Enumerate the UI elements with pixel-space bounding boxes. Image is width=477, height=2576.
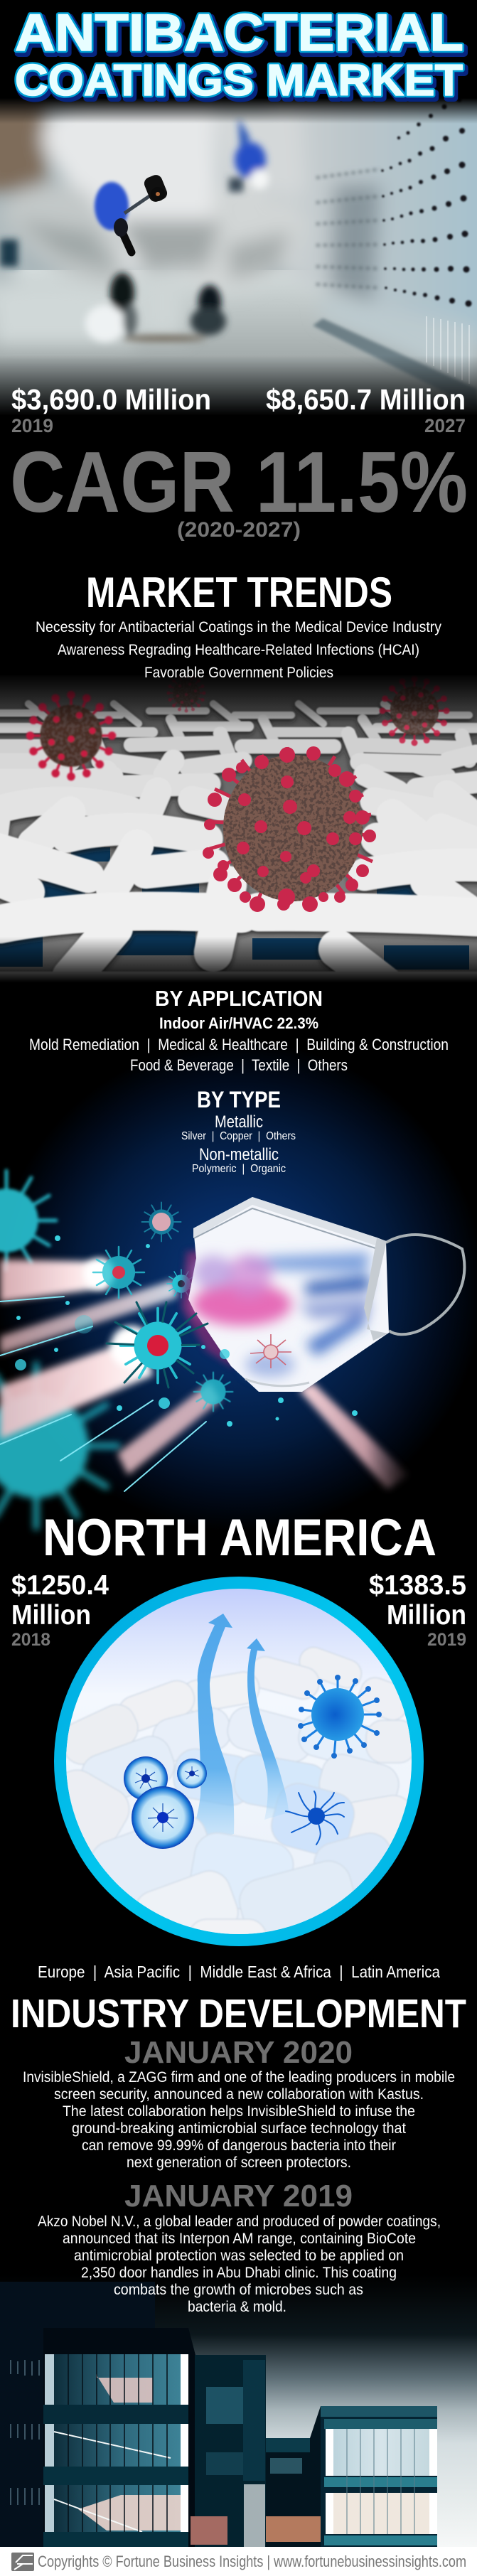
mask shadow glow xyxy=(181,1251,235,1368)
wall grille xyxy=(427,316,469,384)
market trends list: Favorable Government Policies xyxy=(144,665,333,681)
wall perforation streaks xyxy=(316,169,380,288)
date: january 2019: JANUARY 2019 xyxy=(124,2179,353,2213)
north america 2018 value: 2018 xyxy=(11,1630,50,1650)
CAGR headline: (2020-2027) xyxy=(177,518,301,542)
north america 2018 value: $1250.4 xyxy=(11,1570,109,1601)
title: COATINGS MARKET xyxy=(15,56,463,105)
icon: fortune business insights logo xyxy=(11,2553,34,2571)
january 2019 paragraph: bacteria & mold. xyxy=(188,2299,286,2315)
title: COATINGS MARKET xyxy=(17,59,465,108)
light beams xyxy=(0,1260,409,1489)
big blurred virus top left xyxy=(0,1171,56,1270)
leading application share: Indoor Air/HVAC 22.3% xyxy=(159,1014,318,1032)
title: ANTIBACTERIAL xyxy=(15,4,463,62)
low connecting block xyxy=(266,2406,324,2547)
market trends list xyxy=(36,619,441,681)
title: ANTIBACTERIAL xyxy=(15,4,463,62)
january 2020 paragraph xyxy=(23,2069,455,2171)
north america 2019 value: $1383.5 xyxy=(369,1570,466,1601)
floating particles xyxy=(15,1235,358,1427)
application list: Food & Beverage | Textile | Others xyxy=(130,1056,348,1074)
north america 2019 value: Million xyxy=(387,1600,466,1631)
type: metallic: Silver | Copper | Others xyxy=(181,1130,296,1142)
bubble bacteria xyxy=(124,1756,207,1849)
main block xyxy=(43,2328,200,2547)
type: non-metallic: Polymeric | Organic xyxy=(192,1163,286,1175)
tower left xyxy=(0,2282,155,2547)
market size 2019: 2019 xyxy=(11,415,53,436)
january 2019 paragraph xyxy=(38,2213,441,2315)
upward arrows xyxy=(196,1614,289,1835)
blue virus xyxy=(298,1675,382,1759)
january 2020 paragraph: can remove 99.99% of dangerous bacteria into their xyxy=(82,2137,396,2154)
type: metallic xyxy=(181,1112,296,1142)
cyan rays xyxy=(0,1297,206,1491)
background photo: office building xyxy=(0,2275,477,2547)
background virus right xyxy=(380,675,449,746)
january 2020 paragraph: The latest collaboration helps InvisibleShield to infuse the xyxy=(63,2103,415,2120)
january 2019 paragraph: combats the growth of microbes such as xyxy=(114,2282,363,2298)
title: COATINGS MARKET xyxy=(15,56,463,105)
january 2020 paragraph: next generation of screen protectors. xyxy=(127,2154,351,2171)
north america 2018 value: Million xyxy=(11,1600,91,1631)
woven fabric strands xyxy=(0,704,477,989)
market trends list: Awareness Regrading Healthcare-Related Infections (HCAI) xyxy=(58,642,419,658)
market size 2027: $8,650.7 Million xyxy=(266,383,466,416)
circle illustration: antibacterial coated surface xyxy=(33,1577,424,1962)
wall perforation dots xyxy=(381,97,472,307)
illustration: face mask blocking viruses xyxy=(0,1041,477,1532)
heading: north america: NORTH AMERICA xyxy=(43,1509,436,1567)
viruses xyxy=(84,1203,233,1412)
application list xyxy=(29,1036,449,1074)
january 2019 paragraph: announced that its Interpon AM range, containing BioCote xyxy=(63,2231,416,2247)
north america 2019 value xyxy=(369,1570,466,1650)
market size 2027: 2027 xyxy=(424,415,466,436)
title: ANTIBACTERIAL xyxy=(17,7,466,65)
background virus top xyxy=(166,680,206,713)
north america 2018 value xyxy=(11,1570,109,1650)
quilted pillows back rows xyxy=(66,1646,412,1855)
type: non-metallic: Non-metallic xyxy=(199,1145,279,1164)
other regions list: Europe | Asia Pacific | Middle East & Africa | Latin America xyxy=(38,1963,440,1981)
heading: by type: BY TYPE xyxy=(197,1087,281,1112)
tentacled bacterium xyxy=(286,1791,344,1845)
january 2019 paragraph: antimicrobial protection was selected to be applied on xyxy=(74,2248,404,2264)
january 2020 paragraph: ground-breaking antimicrobial surface technology that xyxy=(72,2120,406,2137)
market size 2027 xyxy=(266,383,466,436)
january 2019 paragraph: 2,350 door handles in Abu Dhabi clinic. This coating xyxy=(81,2265,397,2281)
mask body xyxy=(188,1197,389,1392)
market size 2019: $3,690.0 Million xyxy=(11,383,211,416)
mask strap xyxy=(386,1235,464,1334)
type: non-metallic xyxy=(192,1145,286,1175)
type: metallic: Metallic xyxy=(215,1112,263,1132)
photo: technician in protective suit disinfecting a corridor xyxy=(0,85,477,426)
virus on mask xyxy=(250,1334,291,1368)
footer bar xyxy=(0,2547,477,2576)
right block xyxy=(321,2406,437,2547)
date: january 2020: JANUARY 2020 xyxy=(124,2035,353,2070)
sprayer nozzle xyxy=(114,173,169,252)
heading: by application: BY APPLICATION xyxy=(155,986,323,1011)
background virus left xyxy=(26,691,116,780)
january 2020 paragraph: screen security, announced a new collaboration with Kastus. xyxy=(54,2086,424,2103)
middle block xyxy=(191,2355,266,2547)
large front virus xyxy=(107,1302,208,1388)
photo: virus on woven white fabric xyxy=(0,674,477,989)
january 2019 paragraph: Akzo Nobel N.V., a global leader and produced of powder coatings, xyxy=(38,2213,441,2230)
north america 2019 value: 2019 xyxy=(427,1630,466,1650)
dark blue gaps behind the weave xyxy=(0,844,469,970)
heading: market trends: MARKET TRENDS xyxy=(86,569,392,616)
market size 2019 xyxy=(11,383,211,436)
title xyxy=(15,4,466,108)
main virus xyxy=(203,746,376,912)
big blurred virus bottom left xyxy=(0,1364,118,1528)
market trends list: Necessity for Antibacterial Coatings in the Medical Device Industry xyxy=(36,619,441,635)
